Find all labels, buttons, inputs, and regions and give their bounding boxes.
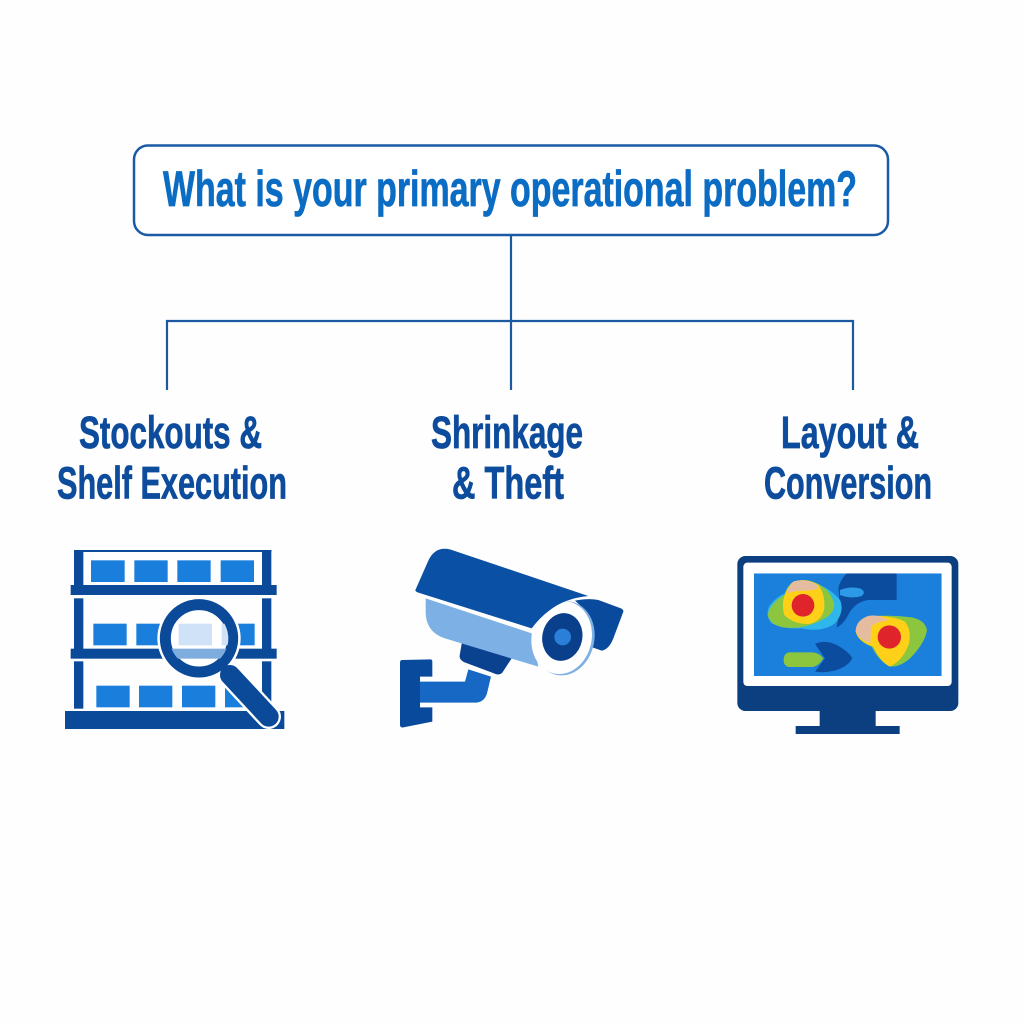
- question box: [134, 146, 888, 235]
- lens ring: [525, 596, 601, 681]
- decision tree connector lines: [167, 235, 853, 390]
- neck: [460, 640, 512, 674]
- rear hood: [575, 599, 623, 651]
- stock boxes: [91, 560, 255, 707]
- label: stockouts and shelf execution: Stockouts &: [79, 407, 262, 458]
- arm: [420, 669, 491, 703]
- label: stockouts and shelf execution: [57, 407, 287, 508]
- label: layout and conversion: [764, 407, 932, 508]
- hot spot two: [856, 616, 927, 667]
- icon: shelves with magnifying glass: [65, 550, 284, 729]
- icon: monitor with heatmap: [737, 556, 958, 734]
- label: shrinkage and theft: [431, 407, 583, 508]
- wall mount: [400, 659, 432, 727]
- heatmap screen: [754, 573, 942, 676]
- hot spot one: [768, 580, 842, 630]
- monitor bezel: [743, 563, 952, 686]
- label: layout and conversion: Conversion: [764, 458, 932, 508]
- label: layout and conversion: Layout &: [781, 407, 919, 458]
- magnifying glass: [157, 597, 269, 717]
- icon: security camera: [400, 549, 623, 727]
- monitor body: [737, 556, 958, 711]
- camera body: [426, 598, 538, 667]
- label: stockouts and shelf execution: Shelf Execution: [57, 458, 287, 508]
- monitor stand: [796, 708, 900, 734]
- label: shrinkage and theft: & Theft: [452, 458, 564, 508]
- shelving frame: [65, 550, 284, 729]
- label: shrinkage and theft: Shrinkage: [431, 407, 583, 458]
- top hood: [415, 549, 588, 628]
